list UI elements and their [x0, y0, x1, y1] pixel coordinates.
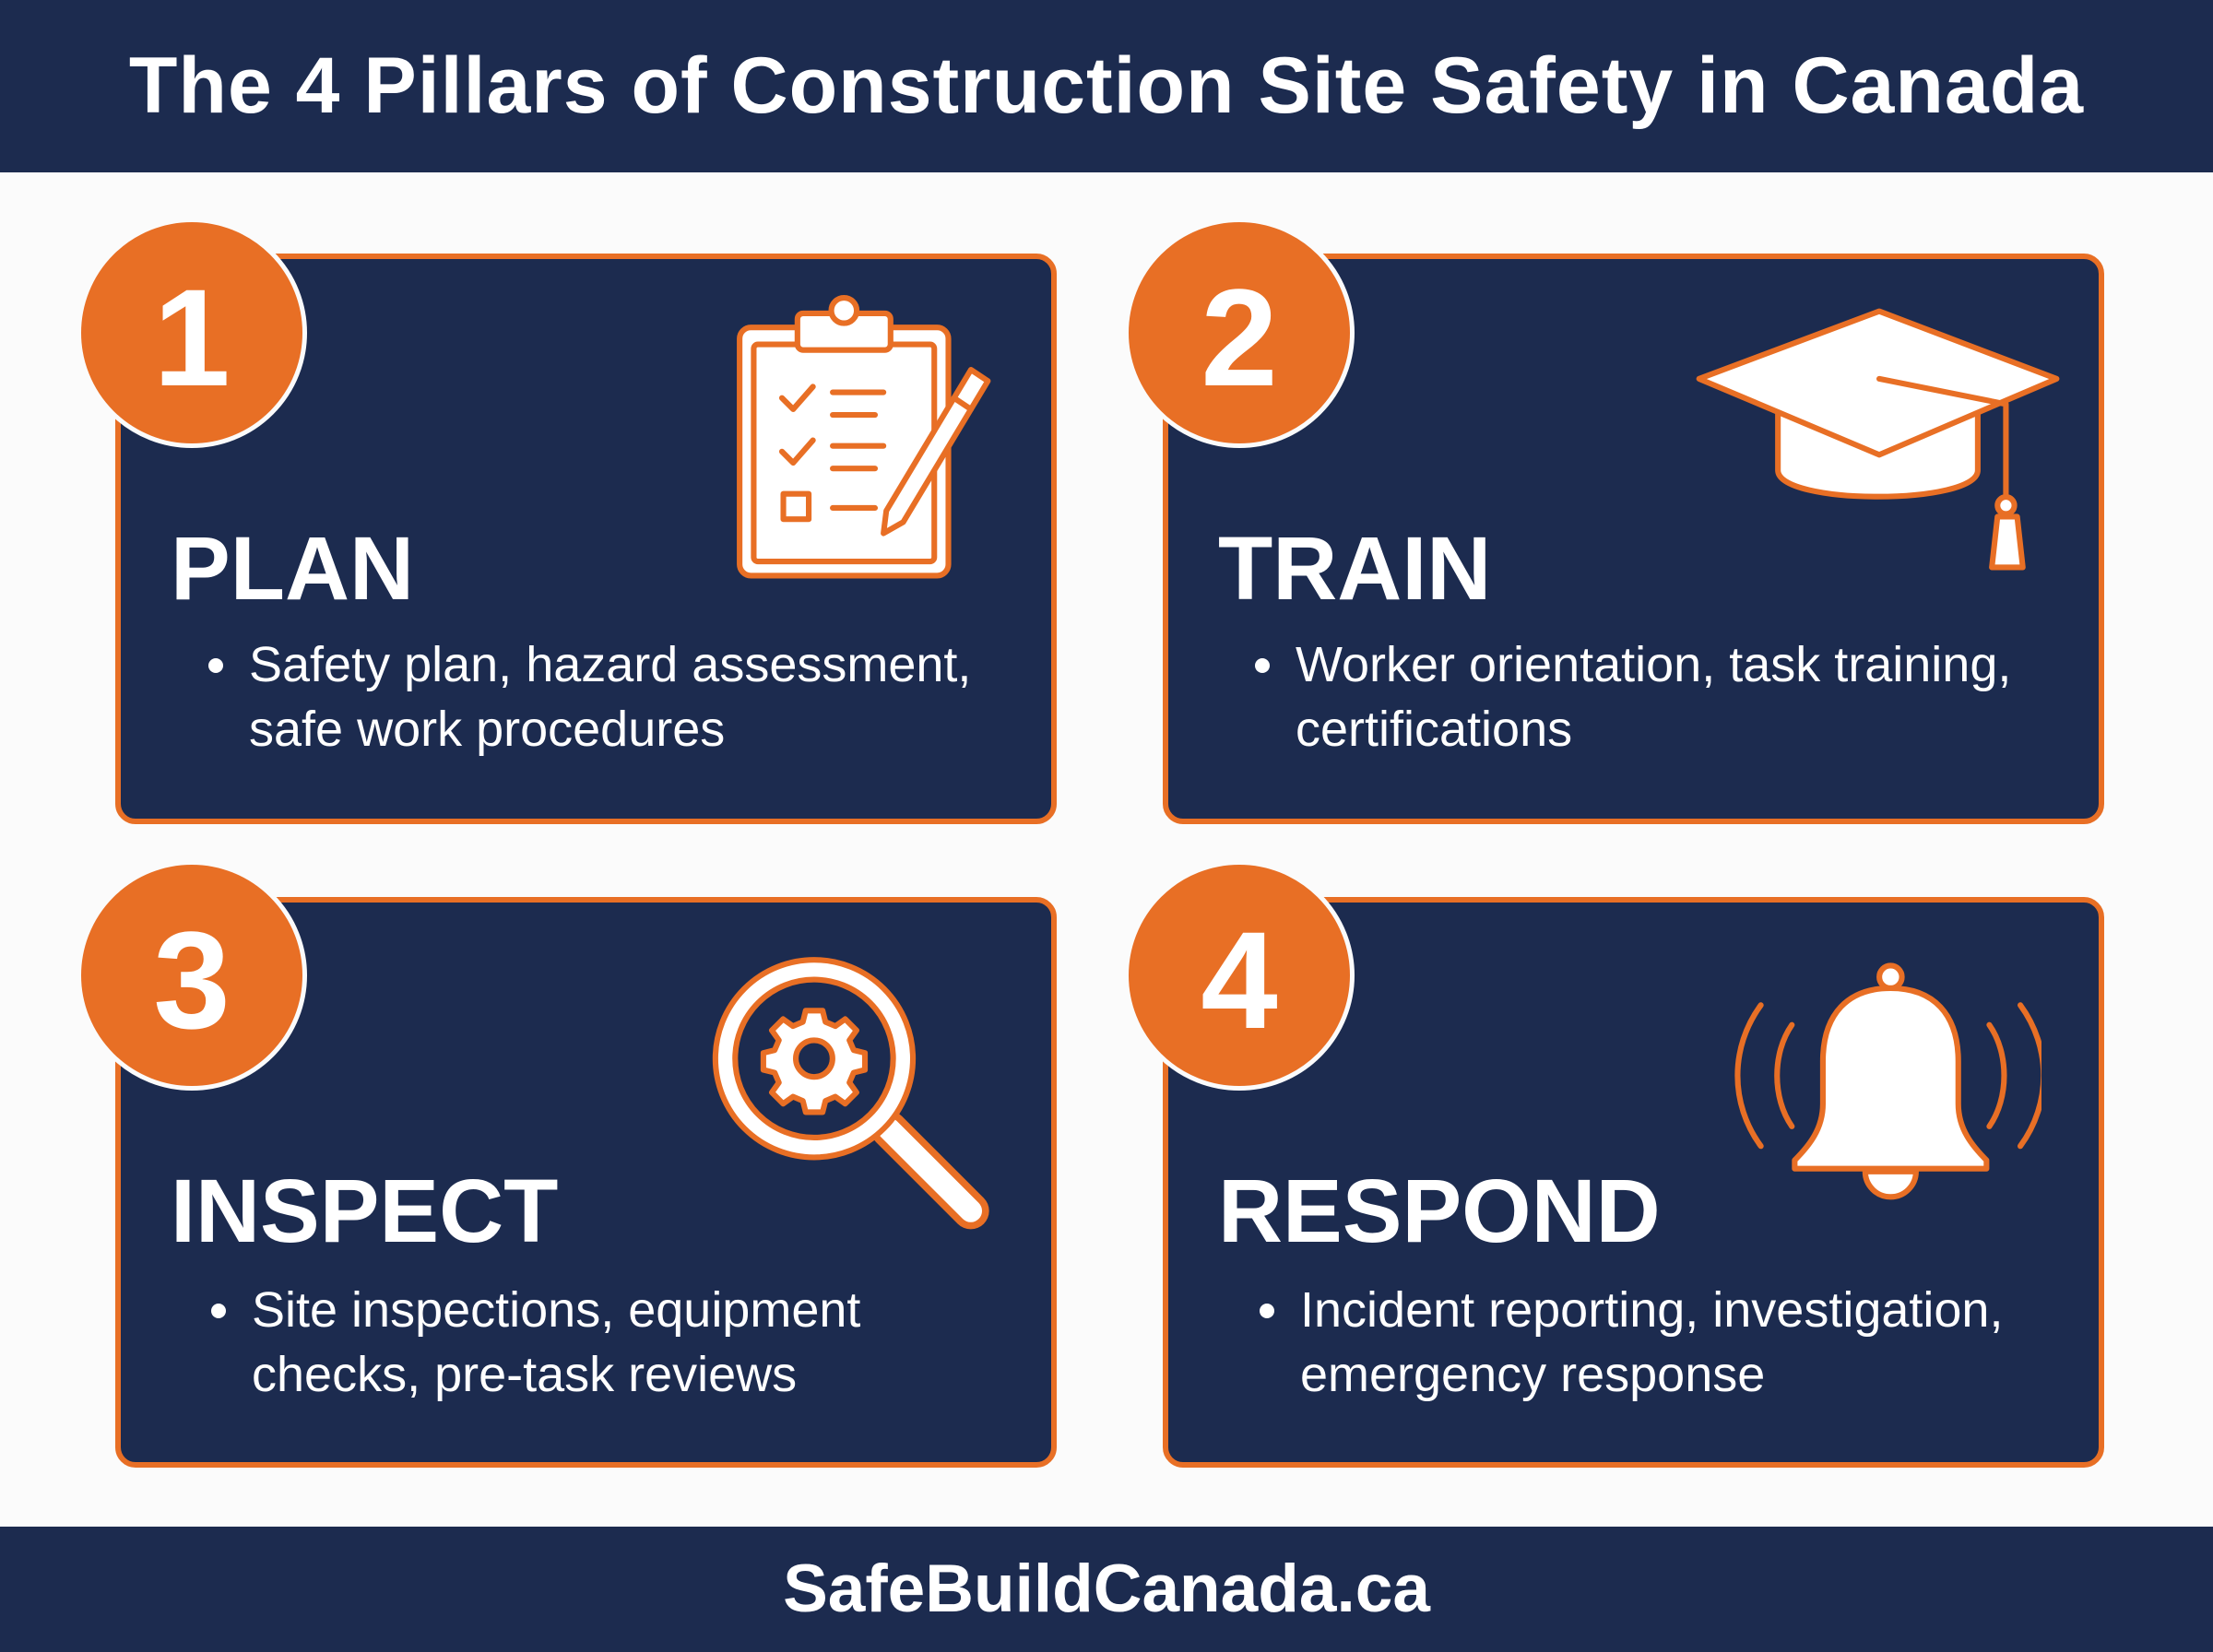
number 3: [77, 860, 307, 1091]
footer: [0, 1527, 2213, 1652]
text: respond: [1300, 1278, 2003, 1407]
heading: train: TRAIN: [1218, 518, 1491, 619]
text: train: certifications: [1296, 702, 1572, 757]
text: plan: Safety plan, hazard assessment,: [249, 637, 971, 692]
number 3: 3: [153, 903, 231, 1057]
text: inspect: [252, 1278, 860, 1407]
heading: plan: PLAN: [171, 518, 414, 619]
panel: inspect: [115, 897, 1057, 1468]
text: respond: emergency response: [1300, 1347, 1765, 1402]
text: respond: Incident reporting, investigation,: [1300, 1282, 2003, 1338]
number 4: [1124, 860, 1355, 1091]
number 2: [1124, 218, 1355, 448]
title: [0, 0, 2213, 172]
icon: clipboard: [737, 295, 990, 579]
panel: respond: [1163, 897, 2104, 1468]
icon: graduation cap: [1697, 308, 2060, 570]
icon: magnifier: [712, 957, 989, 1230]
text: inspect: checks, pre-task reviews: [252, 1347, 797, 1402]
panel: plan: [115, 254, 1057, 824]
text: plan: [249, 632, 971, 761]
heading: inspect: INSPECT: [171, 1161, 558, 1261]
text: train: [1296, 632, 2011, 761]
icon: bell: [1734, 962, 2041, 1200]
number 4: 4: [1201, 903, 1278, 1057]
text: plan: safe work procedures: [249, 702, 725, 757]
number 1: 1: [153, 260, 231, 415]
title: The 4 Pillars of Construction Site Safety in Canada: [129, 41, 2084, 130]
number 1: [77, 218, 307, 448]
number 2: 2: [1201, 260, 1278, 415]
footer: SafeBuildCanada.ca: [783, 1552, 1430, 1626]
heading: respond: RESPOND: [1218, 1161, 1661, 1261]
text: train: Worker orientation, task training,: [1296, 637, 2011, 692]
text: inspect: Site inspections, equipment: [252, 1282, 860, 1338]
panel: train: [1163, 254, 2104, 824]
